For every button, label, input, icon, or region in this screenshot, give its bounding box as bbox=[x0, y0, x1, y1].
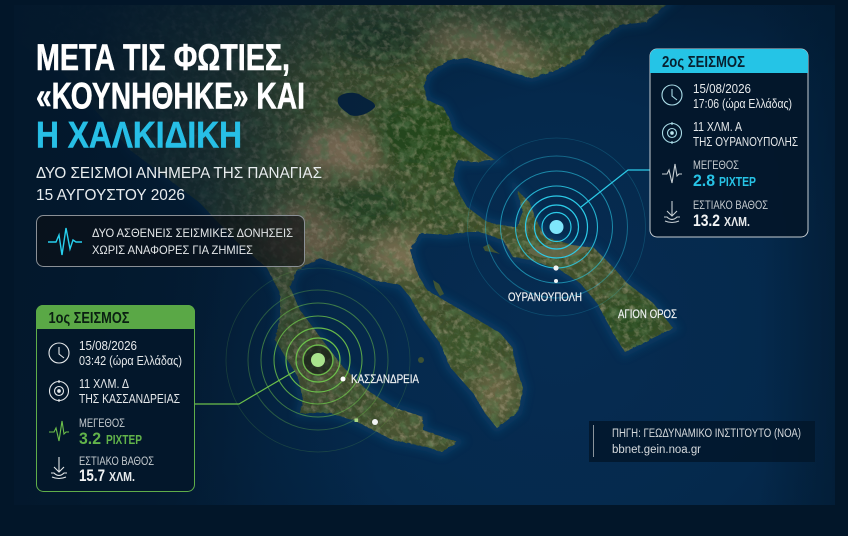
panel heading: 2ος ΣΕΙΣΜΟΣ bbox=[662, 54, 745, 71]
place label: Mount Athos: ΑΓΙΟΝ ΟΡΟΣ bbox=[618, 307, 677, 321]
focal depth bbox=[693, 198, 768, 230]
icon: seismograph pulse bbox=[48, 228, 82, 255]
focal depth bbox=[79, 454, 154, 485]
title: Η ΧΑΛΚΙΔΙΚΗ bbox=[36, 114, 242, 156]
olive overlay near epicentre 2 bbox=[527, 244, 590, 258]
icon: pulse bbox=[49, 421, 69, 441]
place label: Ouranoupoli bbox=[508, 265, 582, 304]
leader line: green bbox=[195, 371, 295, 404]
location bbox=[79, 377, 180, 406]
date and time: 03:42 (ώρα Ελλάδας) bbox=[79, 354, 182, 368]
magnitude bbox=[693, 158, 756, 190]
date and time bbox=[79, 339, 182, 368]
date and time: 15/08/2026 bbox=[79, 339, 137, 353]
epicentre 2: cyan rings bbox=[468, 138, 646, 316]
source box bbox=[589, 421, 815, 462]
location: ΤΗΣ ΚΑΣΣΑΝΔΡΕΙΑΣ bbox=[79, 392, 180, 406]
panel heading: 1ος ΣΕΙΣΜΟΣ bbox=[48, 310, 130, 327]
place label: Kassandreia: ΚΑΣΣΑΝΔΡΕΙΑ bbox=[351, 372, 419, 386]
source box: bbnet.gein.noa.gr bbox=[612, 444, 701, 456]
callout text bbox=[92, 226, 293, 257]
magnitude: ΡΙΧΤΕΡ bbox=[719, 174, 756, 189]
focal depth: ΧΛΜ. bbox=[109, 469, 135, 484]
icon: clock bbox=[662, 85, 682, 105]
sea bbox=[178, 5, 835, 505]
date and time bbox=[693, 82, 792, 111]
panel: 2nd earthquake bbox=[650, 49, 808, 237]
map markers on Kassandra coast bbox=[354, 418, 378, 425]
location: 11 ΧΛΜ. Α bbox=[693, 120, 743, 134]
source box: ΠΗΓΗ: ΓΕΩΔΥΝΑΜΙΚΟ ΙΝΣΤΙΤΟΥΤΟ (ΝΟΑ) bbox=[612, 428, 801, 440]
magnitude: ΜΕΓΕΘΟΣ bbox=[693, 158, 739, 172]
icon: target bbox=[50, 380, 68, 402]
magnitude: 3.2 bbox=[79, 429, 101, 448]
islands bbox=[418, 244, 500, 363]
callout text: ΔΥΟ ΑΣΘΕΝΕΙΣ ΣΕΙΣΜΙΚΕΣ ΔΟΝΗΣΕΙΣ bbox=[92, 226, 293, 240]
magnitude: ΡΙΧΤΕΡ bbox=[106, 432, 142, 447]
magnitude: 2.8 bbox=[693, 171, 715, 190]
focal depth: 15.7 bbox=[79, 466, 105, 485]
callout text: ΧΩΡΙΣ ΑΝΑΦΟΡΕΣ ΓΙΑ ΖΗΜΙΕΣ bbox=[92, 243, 253, 257]
subtitle bbox=[36, 165, 322, 204]
focal depth: ΕΣΤΙΑΚΟ ΒΑΘΟΣ bbox=[693, 198, 768, 212]
focal depth: 13.2 bbox=[693, 211, 720, 230]
epicentre 1: green rings bbox=[226, 268, 410, 452]
coastal shallow-water glow bbox=[260, 5, 678, 457]
panel header bbox=[36, 305, 195, 329]
panel: 1st earthquake bbox=[36, 305, 195, 492]
location: 11 ΧΛΜ. Δ bbox=[79, 377, 129, 391]
focal depth: ΧΛΜ. bbox=[724, 214, 750, 229]
focal depth: ΕΣΤΙΑΚΟ ΒΑΘΟΣ bbox=[79, 454, 154, 468]
subtitle: 15 ΑΥΓΟΥΣΤΟΥ 2026 bbox=[36, 187, 185, 204]
map vignette bbox=[14, 5, 444, 505]
icon: pulse bbox=[662, 164, 682, 183]
location: ΤΗΣ ΟΥΡΑΝΟΥΠΟΛΗΣ bbox=[693, 135, 798, 149]
title bbox=[36, 37, 305, 156]
icon: depth arrow bbox=[664, 201, 680, 222]
magnitude bbox=[79, 416, 142, 448]
icon: depth arrow bbox=[51, 457, 67, 478]
leader line: cyan bbox=[581, 170, 650, 207]
title: «ΚΟΥΝΗΘΗΚΕ» ΚΑΙ bbox=[36, 76, 305, 116]
title: ΜΕΤΑ ΤΙΣ ΦΩΤΙΕΣ, bbox=[36, 37, 290, 78]
callout: two weak tremors bbox=[36, 216, 304, 266]
panel header bbox=[650, 49, 808, 73]
subtitle: ΔΥΟ ΣΕΙΣΜΟΙ ΑΝΗΜΕΡΑ ΤΗΣ ΠΑΝΑΓΙΑΣ bbox=[36, 165, 322, 182]
icon: target bbox=[662, 122, 682, 144]
magnitude: ΜΕΓΕΘΟΣ bbox=[79, 416, 125, 430]
place label: Ouranoupoli: ΟΥΡΑΝΟΥΠΟΛΗ bbox=[508, 290, 582, 304]
icon: clock bbox=[49, 343, 69, 363]
land: Chalkidiki peninsulas bbox=[104, 5, 673, 452]
date and time: 17:06 (ώρα Ελλάδας) bbox=[693, 97, 792, 111]
date and time: 15/08/2026 bbox=[693, 82, 751, 96]
location bbox=[693, 120, 798, 149]
lake bbox=[338, 93, 375, 116]
